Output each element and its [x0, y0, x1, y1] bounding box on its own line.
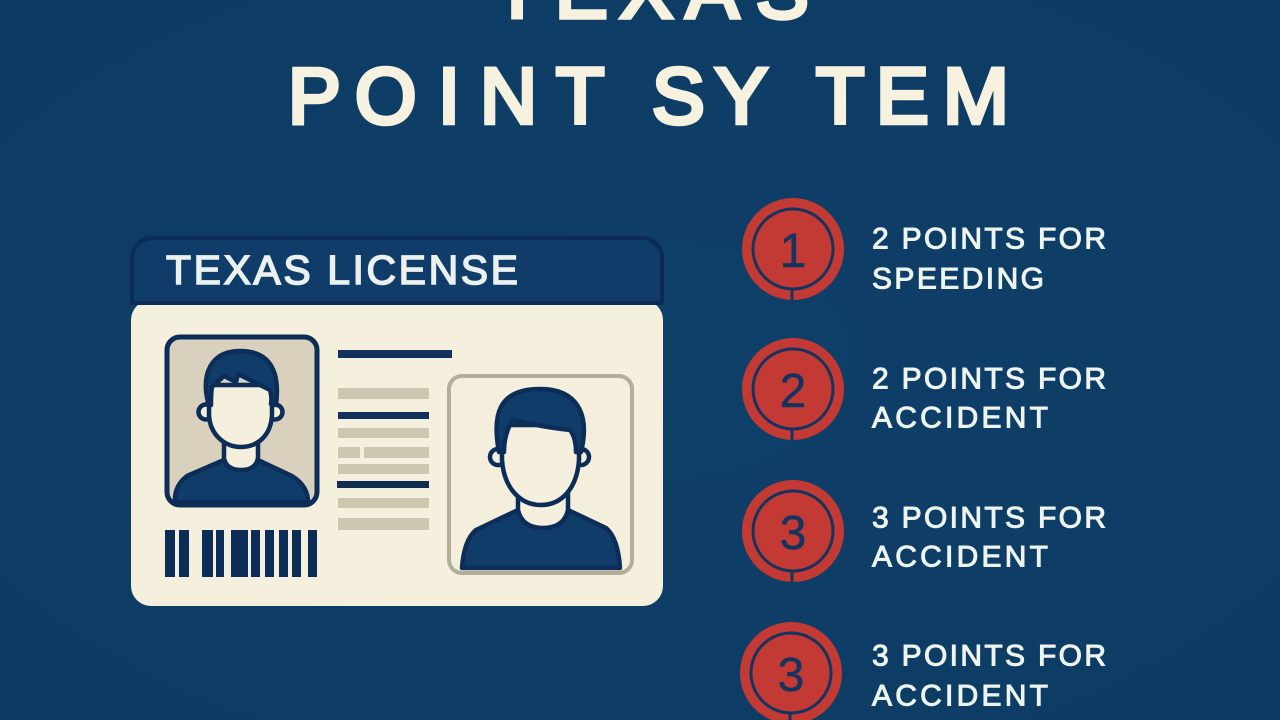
label 1: SPEEDING — [872, 262, 1044, 296]
badge 1 — [742, 198, 844, 300]
badge 2: 2 — [780, 365, 806, 418]
label 3: ACCIDENT — [872, 540, 1048, 574]
badge 3 — [742, 480, 844, 582]
label 3 — [872, 502, 1106, 574]
label 2 — [872, 362, 1106, 434]
badge 4: 3 — [778, 649, 804, 702]
photo frame left — [167, 337, 317, 505]
label 1: 2 POINTS FOR — [872, 222, 1106, 256]
panel: Texas license card — [131, 238, 663, 606]
card heading: TEXAS LICENSE — [166, 247, 518, 293]
badge 1: 1 — [780, 225, 806, 278]
point item 1 — [742, 198, 1106, 300]
label 4: 3 POINTS FOR — [872, 640, 1106, 672]
portrait right — [462, 389, 620, 568]
point item 4 — [740, 622, 1106, 720]
title: POINT SY TEM — [288, 51, 1009, 140]
title — [288, 0, 1009, 140]
point item 3 — [742, 480, 1106, 582]
portrait left — [175, 351, 308, 502]
photo frame right — [449, 376, 632, 573]
card header band — [132, 238, 662, 303]
label 4: ACCIDENT — [872, 680, 1048, 712]
barcode — [165, 530, 317, 577]
badge 4 — [740, 622, 842, 720]
ID text lines — [337, 350, 452, 530]
label 2: 2 POINTS FOR — [872, 362, 1106, 396]
label 4 — [872, 640, 1106, 712]
point item 2 — [742, 338, 1106, 440]
badge 2 — [742, 338, 844, 440]
label 1 — [872, 222, 1106, 296]
badge 3: 3 — [780, 507, 806, 560]
label 3: 3 POINTS FOR — [872, 502, 1106, 534]
label 2: ACCIDENT — [872, 402, 1048, 434]
